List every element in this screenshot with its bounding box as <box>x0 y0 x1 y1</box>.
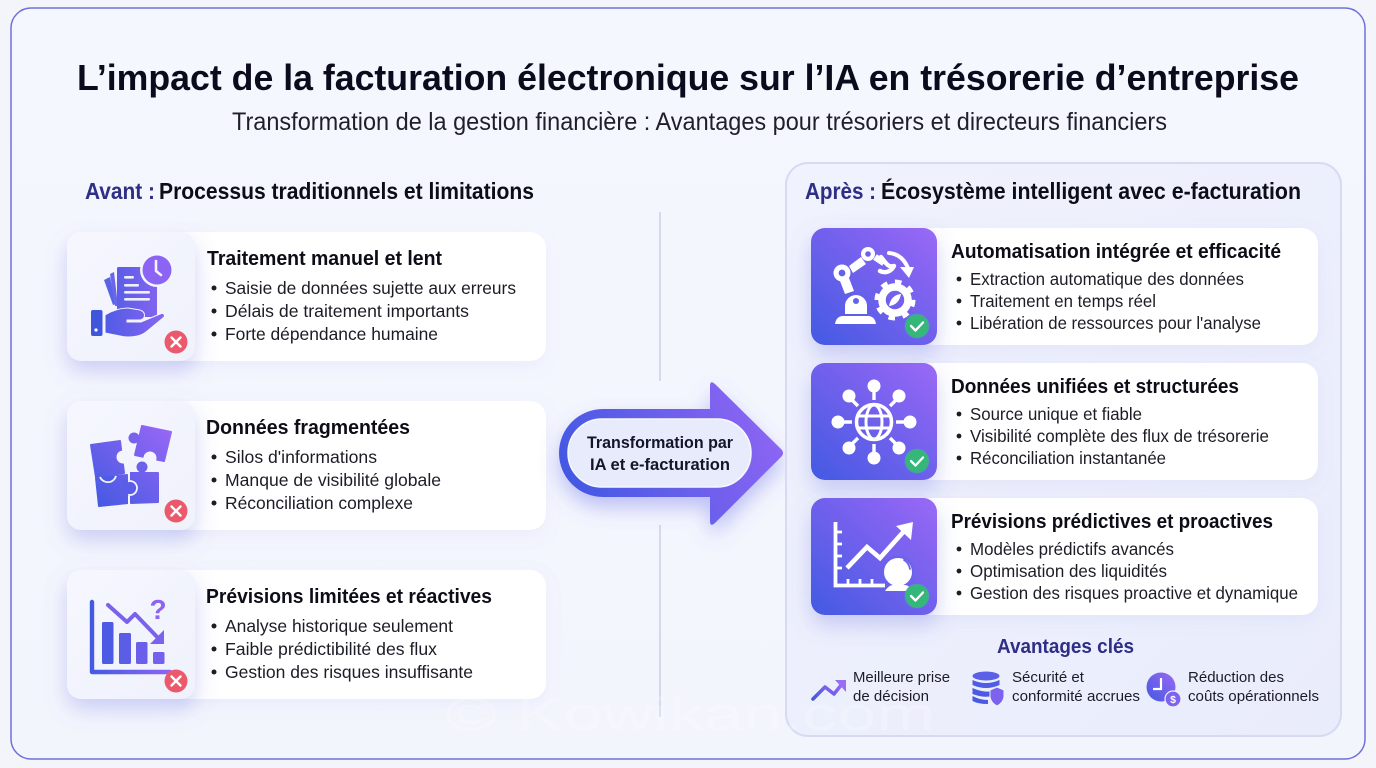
bullet list: Silos d'informations <box>225 447 377 467</box>
benefit: coûts: coûts opérationnels <box>1188 688 1319 705</box>
icon: trend arrow <box>813 680 846 699</box>
bullet list: Réconciliation complexe <box>225 493 413 513</box>
benefit: décision: Meilleure prise <box>853 669 950 686</box>
icon: green check badge <box>905 449 929 473</box>
arrow: transformation <box>559 382 783 525</box>
icon: red cross badge <box>164 330 188 354</box>
bullet list: Analyse historique seulement <box>225 616 453 636</box>
arrow: transformation: Transformation par <box>587 433 733 452</box>
card: données unifiées <box>811 363 1318 480</box>
panel: après: Écosystème intelligent avec e-facturation <box>881 177 1301 204</box>
card title: Traitement manuel et lent <box>207 248 442 270</box>
bullet list: Extraction automatique des données <box>970 269 1244 289</box>
icon: green check badge <box>905 314 929 338</box>
bullet list: Saisie de données sujette aux erreurs <box>225 278 516 298</box>
bottom-right piece <box>130 473 158 503</box>
panel: avant: Processus traditionnels et limitations <box>159 178 534 204</box>
card: automatisation <box>811 228 1318 345</box>
bullet list: Délais de traitement importants <box>225 301 469 321</box>
bullet list: Visibilité complète des flux de trésorerie <box>970 426 1269 446</box>
bullet list: Manque de visibilité globale <box>225 470 441 490</box>
bullet list <box>957 539 1298 603</box>
card title: Prévisions prédictives et proactives <box>951 511 1273 533</box>
icon: database and shield <box>972 672 1004 706</box>
icon: declining chart <box>67 570 195 699</box>
card title: Données fragmentées <box>206 417 410 439</box>
benefit: décision: de décision <box>853 688 929 705</box>
panel: avant <box>67 178 546 699</box>
icon: clock and dollar <box>1146 672 1181 707</box>
title: L’impact de la facturation électronique sur l’IA en trésorerie d’entreprise <box>77 57 1299 98</box>
bullet list: Faible prédictibilité des flux <box>225 639 437 659</box>
bullet list: Traitement en temps réel <box>970 291 1156 311</box>
icon: clock and dollar: $ <box>1170 694 1176 706</box>
watermark: © Kowikan.com <box>445 688 935 740</box>
benefit: décision <box>813 669 950 705</box>
icon: red cross badge <box>164 500 188 522</box>
bullet list: Gestion des risques insuffisante <box>225 662 473 682</box>
card title: Automatisation intégrée et efficacité <box>951 241 1281 263</box>
bullet list: Modèles prédictifs avancés <box>970 539 1174 559</box>
bullet list <box>212 278 516 344</box>
icon: robot arm and gear <box>811 228 937 345</box>
bullet list: Source unique et fiable <box>970 404 1142 424</box>
divider: top <box>659 212 661 381</box>
card: données fragmentées <box>67 401 546 530</box>
panel: après <box>786 163 1341 736</box>
benefit: coûts: Réduction des <box>1188 669 1284 686</box>
top-left piece <box>91 441 124 477</box>
top-right piece <box>135 426 171 461</box>
benefit: coûts <box>1146 669 1319 707</box>
bottom-left piece <box>96 475 128 506</box>
benefit: sécurité: conformité accrues <box>1012 688 1140 705</box>
heading: après: Après : <box>805 178 876 204</box>
icon: globe network <box>811 363 937 480</box>
heading: avantages clés: Avantages clés <box>997 636 1134 658</box>
icon: puzzle <box>67 401 195 530</box>
icon: chart with crystal ball <box>811 498 937 615</box>
icon: red cross badge <box>164 670 188 692</box>
bullet list: Réconciliation instantanée <box>970 448 1166 468</box>
icon: green check badge <box>905 584 929 608</box>
benefit: sécurité: Sécurité et <box>1012 669 1085 686</box>
icon: declining chart: ? <box>149 594 167 625</box>
card title: Prévisions limitées et réactives <box>206 586 492 608</box>
icon: document in hand with clock <box>67 232 195 361</box>
card: traitement manuel <box>67 232 546 361</box>
bullet list <box>957 269 1261 333</box>
bullet list <box>212 616 473 682</box>
heading: avant: Avant : <box>85 178 155 204</box>
card: prévisions prédictives <box>811 498 1318 615</box>
subtitle: Transformation de la gestion financière : Avantages pour trésoriers et directeurs financiers <box>232 108 1167 136</box>
benefit: sécurité <box>972 669 1140 706</box>
bullet list: Libération de ressources pour l'analyse <box>970 313 1261 333</box>
bullet list <box>212 447 441 513</box>
arrow: transformation: IA et e-facturation <box>590 455 730 474</box>
bullet list <box>957 404 1269 468</box>
card title: Données unifiées et structurées <box>951 376 1239 398</box>
bullet list: Forte dépendance humaine <box>225 324 438 344</box>
bullet list: Gestion des risques proactive et dynamique <box>970 583 1298 603</box>
bullet list: Optimisation des liquidités <box>970 561 1167 581</box>
card: prévisions limitées <box>67 570 546 699</box>
